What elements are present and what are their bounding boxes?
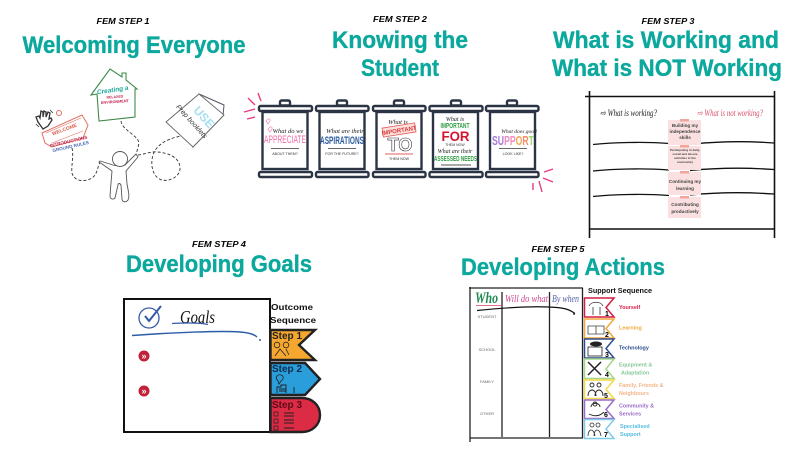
ribbon 2: 2 [605, 332, 609, 339]
ribbon 5: Family, Friends & [619, 383, 664, 389]
scroll 4: What are their [438, 149, 473, 155]
bullet: » [141, 351, 147, 361]
outcome cards: independence [670, 129, 701, 134]
scroll 4: THEM NOW [445, 143, 465, 147]
ribbon 6: Services [619, 412, 641, 418]
step 2 title: Student [361, 55, 439, 82]
ribbon 6 [584, 400, 654, 419]
outcome cards: social and leisure [672, 152, 698, 156]
ribbon 3 [584, 339, 649, 359]
bullet: » [141, 386, 147, 396]
row labels: SCHOOL [479, 347, 496, 352]
ribbon 5: Neighbours [619, 391, 649, 397]
scroll 4: FOR [442, 128, 470, 144]
step 1 label: FEM STEP 1 [96, 17, 150, 26]
house: RELAXED [106, 94, 124, 100]
outcome cards: skills [679, 135, 691, 140]
ribbon 4 [584, 359, 652, 379]
scroll 2 [316, 100, 368, 177]
welcome sign: GROUND RULES [52, 140, 89, 153]
by when heading: By when [552, 294, 579, 305]
outcome sequence heading [270, 302, 316, 325]
step 2 title: Knowing the [332, 27, 468, 54]
scroll 1: What do we [273, 128, 303, 135]
step 2 arrow: Step 2 [272, 364, 302, 375]
outcome cards: learning [676, 186, 694, 191]
ribbon 3: Technology [619, 346, 649, 352]
ribbon 7: Specialised [620, 424, 650, 430]
outcome cards: Continuing my [669, 179, 702, 184]
scroll 4: What is [446, 117, 465, 123]
scroll 5 [486, 100, 538, 177]
scroll 5: What does good [501, 129, 537, 135]
ribbon 6: 6 [604, 412, 608, 419]
bullet [138, 350, 150, 362]
ribbon 1 [584, 298, 640, 318]
goals heading: Goals [180, 307, 215, 327]
row labels [478, 314, 497, 416]
step 3 worksheet [585, 91, 775, 238]
scroll 3: THEM NOW [389, 157, 410, 161]
outcome sequence heading: Outcome [271, 302, 313, 312]
scroll 2: FOR THE FUTURE? [325, 152, 359, 156]
booklet: Prep booklets [174, 104, 208, 141]
ribbon 6: Community & [619, 404, 654, 410]
scroll 3 [373, 100, 426, 177]
step 1 flag: Step 1 [272, 331, 302, 342]
scroll 4 [430, 100, 482, 177]
ribbon 3: 3 [605, 352, 609, 359]
ribbon 7: Support [620, 432, 641, 438]
ribbon 5 [584, 380, 664, 400]
house: Creating a [97, 85, 129, 96]
step 5 table [469, 287, 583, 442]
step 3 tab [270, 398, 320, 432]
step 3 tab: Step 3 [272, 400, 302, 411]
icon: checkmark circle [139, 306, 161, 328]
ribbon 5: 5 [604, 393, 608, 400]
welcome sign [42, 110, 89, 153]
outcome cards: Building my [672, 123, 699, 128]
scroll 2: ASPIRATIONS [320, 135, 364, 147]
step 4 title: Developing Goals [126, 251, 312, 278]
person figure [99, 152, 138, 202]
ribbon 4: 4 [605, 372, 609, 379]
outcome cards: community [677, 160, 693, 164]
will do what heading: Will do what [505, 294, 548, 305]
ribbon 7 [584, 420, 650, 439]
welcome sign: WELCOME [51, 123, 79, 137]
support sequence ribbons [584, 298, 664, 439]
scroll 4: ASSESSED NEEDS [434, 154, 477, 163]
step 3 title [552, 27, 782, 82]
step 1 illustration [36, 69, 224, 202]
row labels: STUDENT [478, 314, 497, 319]
bullet [138, 386, 150, 396]
row labels: OTHER [480, 411, 494, 416]
step 2 title [332, 27, 468, 82]
outcome cards: Contributing [671, 202, 699, 207]
ribbon 1: Yourself [619, 305, 640, 311]
step 5 title: Developing Actions [461, 254, 665, 281]
scroll 1 [259, 100, 312, 177]
step 2 scroll panels [244, 93, 553, 192]
row lines [593, 142, 774, 196]
step 1 title: Welcoming Everyone [22, 32, 246, 59]
dashed paths [72, 121, 182, 181]
scroll 3: What is [388, 119, 408, 126]
scroll 1: ABOUT THEM? [272, 152, 298, 156]
icon: waving hand [36, 110, 53, 129]
step 4 goals board [124, 299, 270, 432]
ribbon 4: Adaptation [621, 370, 649, 376]
outcome cards [668, 119, 702, 218]
outcome sequence heading: Sequence [270, 315, 316, 325]
house [91, 69, 137, 121]
house: ENVIRONMENT [101, 99, 130, 105]
scroll 2: What are their [326, 128, 364, 135]
scroll 5: SUPPORT [492, 133, 534, 148]
step 1 flag [270, 330, 315, 360]
what is not working heading: ⇨ What is not working? [697, 108, 763, 118]
scroll 1: APPRECIATE [264, 134, 306, 146]
ribbon 2 [584, 319, 642, 339]
booklet [166, 94, 224, 147]
scroll 3: IMPORTANT [381, 126, 417, 137]
burst accents [244, 93, 553, 192]
step 3 label: FEM STEP 3 [642, 17, 695, 26]
row labels: FAMILY [480, 379, 494, 384]
ribbon 4: Equipment & [619, 362, 652, 368]
support sequence heading: Support Sequence [588, 288, 652, 295]
step 3 title: What is NOT Working [552, 55, 782, 82]
scroll 4: IMPORTANT [440, 123, 470, 130]
who heading: Who [475, 290, 498, 307]
outcome cards: activities in the [674, 156, 696, 160]
ribbon 1: 1 [605, 311, 609, 318]
step 3 title: What is Working and [553, 27, 779, 54]
ribbon 2: Learning [619, 326, 642, 332]
step 5 label: FEM STEP 5 [532, 245, 585, 254]
ribbon 7: 7 [604, 432, 608, 439]
scroll 5: LOOK LIKE? [503, 152, 523, 156]
step 2 arrow [270, 363, 320, 395]
what is working heading: ⇨ What is working? [600, 108, 657, 118]
step 2 label: FEM STEP 2 [373, 15, 428, 24]
booklet: USE [191, 103, 217, 131]
outcome cards: productively [671, 209, 699, 214]
scroll 3: TO [388, 135, 412, 155]
step 4 label: FEM STEP 4 [192, 240, 247, 249]
welcome sign: INTRODUCTIONS [49, 135, 88, 148]
outcome cards: Participating in daily, [670, 148, 700, 152]
